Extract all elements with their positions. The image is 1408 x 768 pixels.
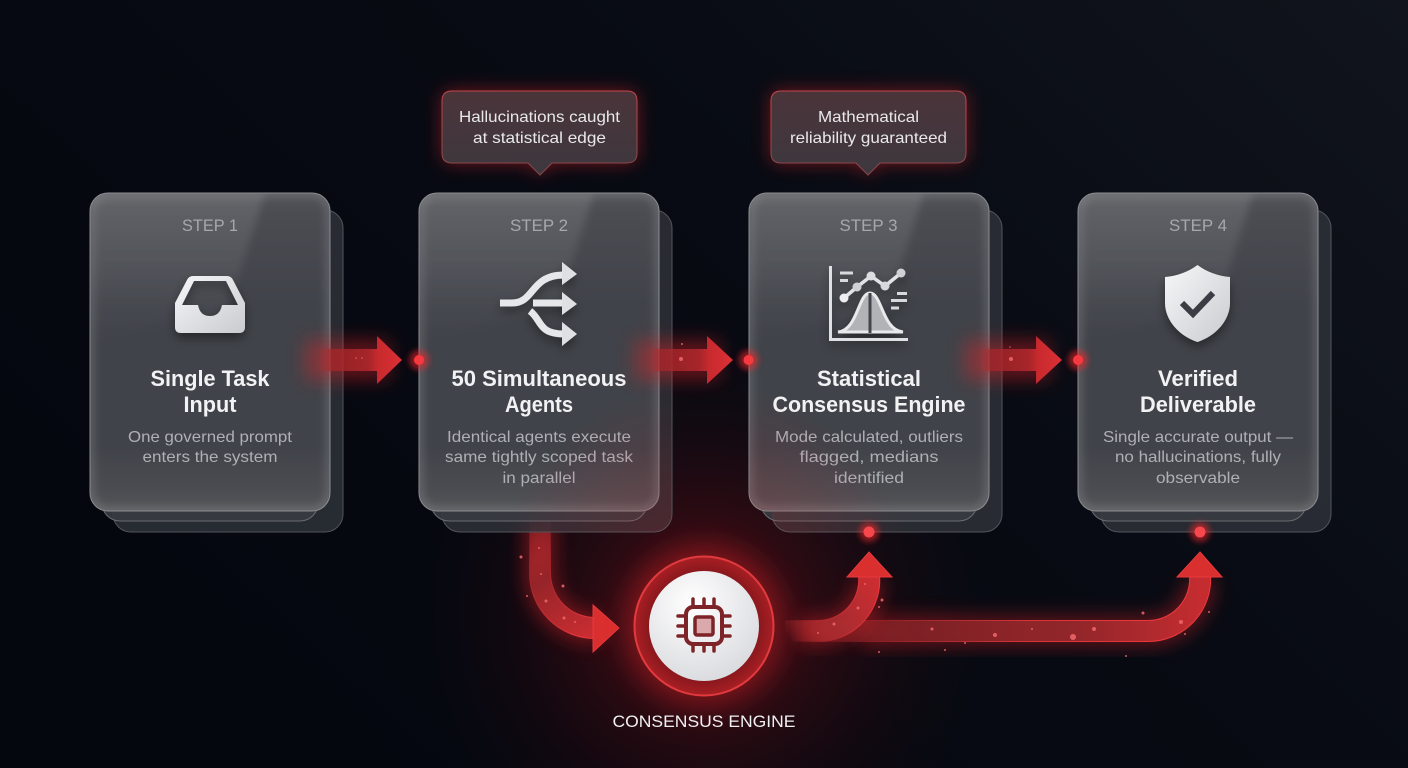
icon: processor chip [678,599,730,651]
card description: Identical agents execute [447,429,631,446]
consensus engine node [624,546,784,706]
step label: STEP 2 [510,216,568,235]
panel: step 4 card [1078,193,1331,532]
callout: hallucinations: at statistical edge [473,130,606,147]
card title: Deliverable [1140,392,1256,417]
card title [772,366,966,417]
card title: Consensus Engine [772,392,966,417]
card description: identified [834,470,904,487]
card description [1103,429,1293,487]
step label: STEP 3 [840,216,898,235]
icon: shield with check [1165,265,1230,342]
card description [775,429,963,487]
card title: Agents [505,392,573,417]
callout: hallucinations: Hallucinations caught [459,109,621,126]
callout: mathematical reliability [771,91,966,175]
arrow: consensus engine up to step 4 [790,552,1222,631]
step label: STEP 4 [1169,216,1227,235]
card title: Input [184,392,237,417]
card title: Statistical [817,366,921,391]
callout: hallucinations [442,91,637,175]
card title [452,366,626,417]
icon: statistics chart [830,266,908,340]
particles [355,343,1210,657]
arrow: step 2 to step 3 [635,336,758,384]
card description: enters the system [142,449,278,466]
card description: Single accurate output — [1103,429,1293,446]
card title [150,366,270,417]
connection dot: step 3 [859,522,879,542]
callout: mathematical reliability: reliability guaranteed [790,130,947,147]
card title: 50 Simultaneous [452,366,626,391]
arrow: consensus engine up to step 3 [785,552,892,631]
card description: no hallucinations, fully [1115,449,1281,466]
connection dot: step 4 [1190,522,1210,542]
card description: Mode calculated, outliers [775,429,963,446]
card description: same tightly scoped task [445,449,634,466]
arrow: step 2 down to consensus engine [540,515,619,652]
card title: Verified [1158,366,1238,391]
panel: step 1 card [90,193,343,532]
red tint over card bottoms [538,419,865,532]
card description [445,429,634,487]
card description: One governed prompt [128,429,293,446]
consensus engine label: CONSENSUS ENGINE [612,712,796,731]
card description: observable [1156,470,1240,487]
card description: in parallel [502,470,576,487]
card title: Single Task [150,366,270,391]
icon: inbox tray [175,276,245,333]
card description [128,429,293,466]
card title [1140,366,1256,417]
panel: step 2 card [419,193,672,532]
card description: flagged, medians [800,449,938,466]
panel: step 3 card [749,193,1002,532]
red glow behind consensus engine [400,330,1020,768]
callout: mathematical reliability: Mathematical [818,109,919,126]
arrow: step 3 to step 4 [965,336,1088,384]
icon: branching arrows [500,262,577,346]
arrow: step 1 to step 2 [305,336,429,384]
step label: STEP 1 [182,216,238,235]
